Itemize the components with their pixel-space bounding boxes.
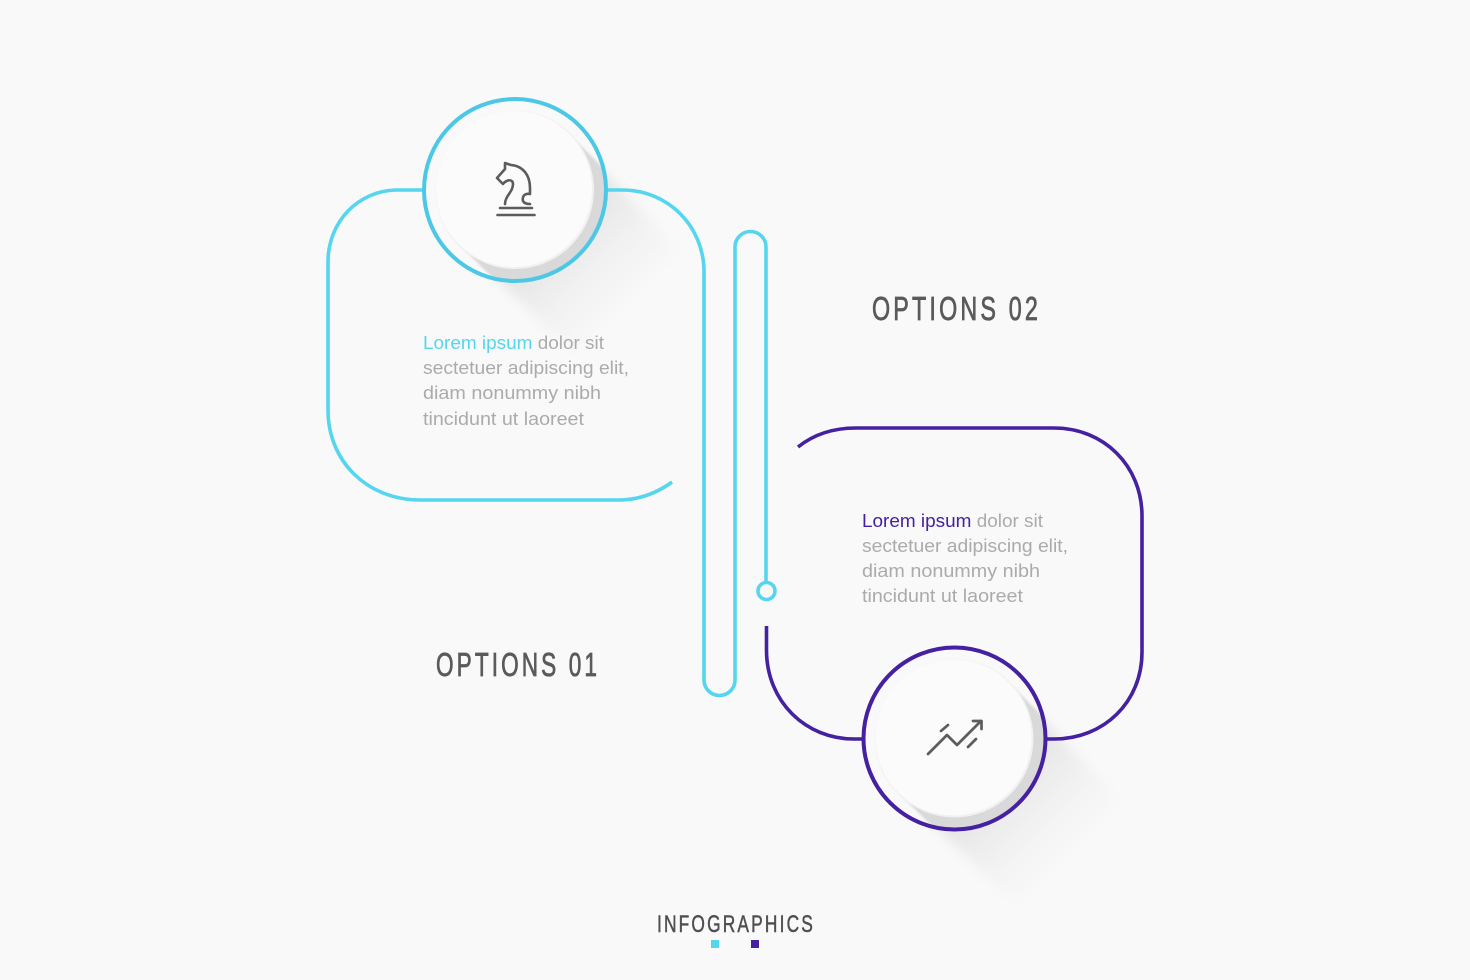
legend square: purple [751, 940, 759, 948]
outline: option 01 card [328, 190, 672, 500]
panel: option 01 [328, 99, 775, 696]
icon: trend arrow [928, 721, 982, 754]
footer title: INFOGRAPHICS [657, 911, 815, 938]
heading: options 01: OPTIONS 01 [436, 646, 600, 683]
icon: chess knight [497, 163, 534, 215]
text block: option 02: tincidunt ut laoreet [862, 585, 1023, 606]
connector: option 02 lower-left arc [766, 626, 863, 739]
long shadow: option 02 circle [954, 738, 1080, 864]
outline: option 02 card [798, 428, 1142, 739]
legend square: cyan [711, 940, 719, 948]
text block: option 01: sectetuer adipiscing elit, [423, 357, 629, 378]
text block: option 02: Lorem ipsum dolor sit [862, 510, 1043, 531]
text block: option 01: tincidunt ut laoreet [423, 408, 584, 429]
circle badge: option 02 [864, 648, 1046, 830]
text block: option 01: diam nonummy nibh [423, 382, 601, 403]
long shadow: option 01 circle [515, 190, 640, 315]
timeline end dot [758, 582, 775, 600]
circle badge: option 01 [424, 99, 606, 281]
text block: option 02: sectetuer adipiscing elit, [862, 535, 1068, 556]
connector: card to timeline stem [607, 190, 766, 696]
text block: option 02: diam nonummy nibh [862, 560, 1040, 581]
text block: option 01 [423, 332, 629, 429]
panel: option 02 [766, 428, 1142, 864]
text block: option 02 [862, 510, 1068, 606]
heading: options 02: OPTIONS 02 [872, 290, 1041, 327]
infographic canvas [326, 97, 1144, 948]
text block: option 01: Lorem ipsum dolor sit [423, 332, 604, 353]
